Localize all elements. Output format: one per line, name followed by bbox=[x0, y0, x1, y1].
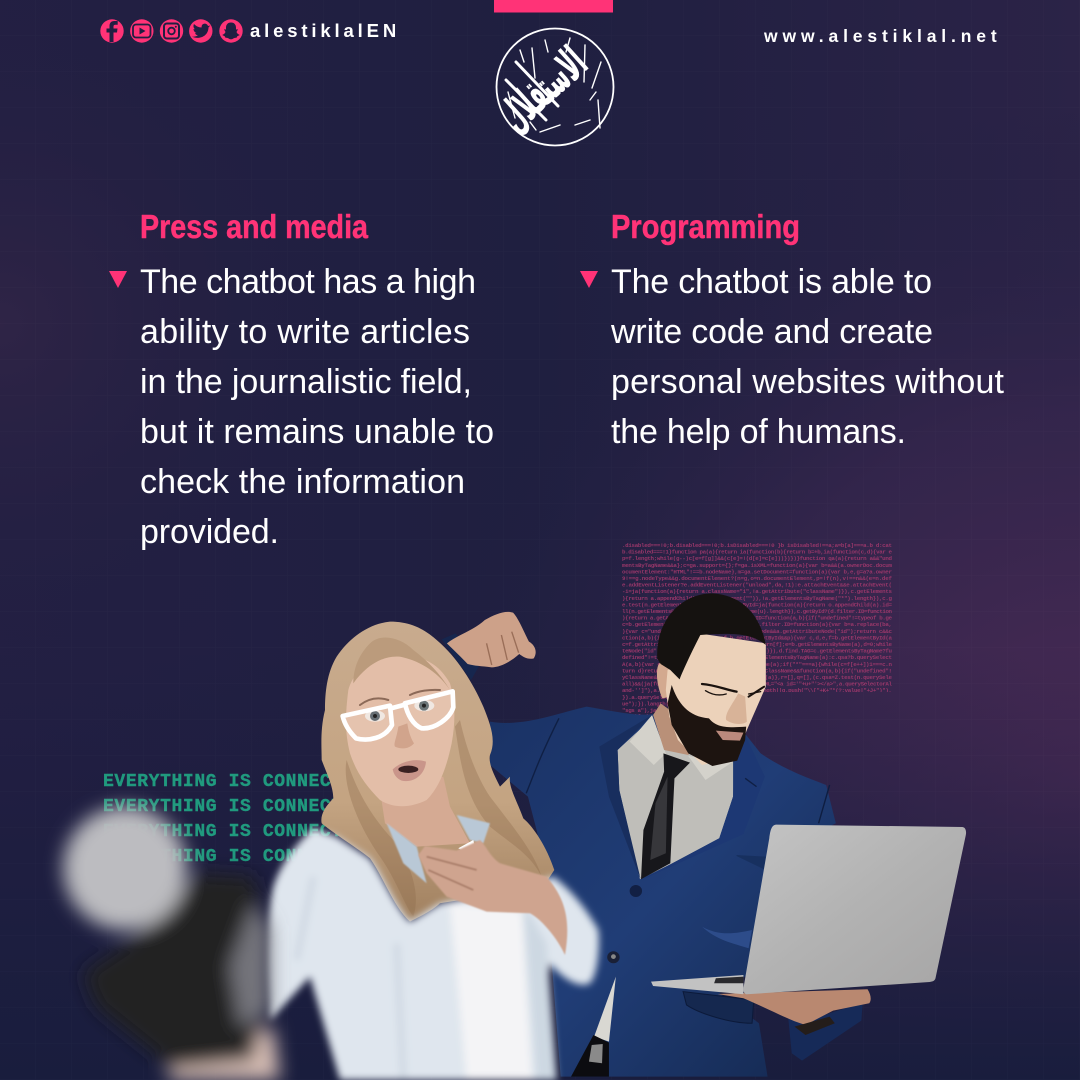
code texture: yClassName&&p)return b.getElementsByClassName(a)},r=[],q=[],(c.qsa=Z.test(n.querySele bbox=[622, 674, 893, 681]
green repeated slogan: EVERYTHING IS CONNECTED bbox=[103, 772, 365, 792]
icon: instagram bbox=[160, 19, 183, 43]
code texture: c=f.getAttributeNode("id"),c&&c.value===a)return[f];e=b.getElementsByName(a),d=0;while bbox=[622, 641, 893, 648]
text block: press and media: The chatbot has a high bbox=[140, 263, 476, 301]
mic head bbox=[63, 807, 187, 930]
social icons row bbox=[100, 19, 243, 43]
text block: programming: write code and create bbox=[610, 313, 933, 351]
code texture: .disabled===!0;b.disabled===!0;b.isDisabled===!0 }b isDisabled!==a;a=b[a]===a.b d:cat bbox=[622, 542, 892, 549]
mic sleeve shadow bbox=[230, 903, 270, 1027]
woman hair parting bbox=[353, 638, 450, 690]
code texture: defined"!=typeof b.getElementsByTagName?b.getElementsByTagName(a):c.qsa?b.querySelect bbox=[622, 654, 892, 661]
man lips bbox=[716, 731, 743, 741]
woman back hair bbox=[321, 622, 554, 922]
man fist bbox=[447, 612, 536, 667]
code texture: b.disabled===!1}function pa(a){return ia(function(b){return b=+b,ia(function(c,d){var e bbox=[622, 549, 893, 556]
text block: press and media: provided. bbox=[140, 513, 279, 551]
code texture: turn d}return f},d.find.CLASS=c.getElementsByClassName&&function(a,b){if("undefined"! bbox=[622, 667, 892, 674]
text block: press and media bbox=[140, 263, 494, 551]
code texture: ocumentElement:"HTML"!==b.nodeName},m=ga.setDocument=function(a){var b,e,g=a?a.owner bbox=[622, 568, 893, 575]
icon: facebook bbox=[100, 19, 124, 43]
code texture: 9!==g.nodeType&&g.documentElement?(n=g,o=n.documentElement,p=!f(n),v!==n&&(e=n.def bbox=[622, 575, 893, 582]
code texture: p=f.length;while(g--)c[e=f[g]]&&(c[e]=!(d[e]=c[e]))})})}function qa(a){return a&&"und bbox=[622, 555, 893, 562]
code texture: ction(a,b){if("undefined"!=typeof b.getElementById&&p){var c,d,e,f=b.getElementById(a bbox=[622, 634, 893, 641]
code texture: A(a,b){var c,d=[],e=0,f=b.getElementsByTagName(a);if("*"===a){while(c=f[e++])1===c.n bbox=[622, 661, 893, 668]
laptop bbox=[651, 825, 966, 994]
icon: twitter bbox=[189, 19, 212, 43]
code texture: e.test(n.getElementsByClassName),c.getById=ja(function(a){return o.appendChild(a).id= bbox=[622, 601, 893, 608]
woman collar bbox=[387, 815, 490, 883]
text block: programming: the help of humans. bbox=[611, 413, 906, 451]
bullet marker left bbox=[109, 271, 127, 288]
bullet marker right bbox=[580, 271, 598, 288]
man jacket bbox=[490, 707, 836, 1077]
man collar bbox=[630, 715, 733, 780]
code texture: teNode("id"),c&&c.value===a)return[f]}return[]}}),d.find.TAG=c.getElementsByTagName?fu bbox=[622, 648, 893, 655]
woman glasses bbox=[343, 691, 453, 740]
man shirt bottom and trousers bbox=[571, 977, 616, 1077]
code texture: c=b.getElementById(a);return c?[c]:[]}}):(d.filter.ID=function(a){var b=a.replace(ba, bbox=[622, 621, 892, 628]
woman eyes bbox=[365, 700, 434, 722]
man hair bbox=[657, 593, 766, 679]
green repeated slogan bbox=[104, 774, 338, 862]
woman neck bbox=[380, 777, 470, 847]
website url: www.alestiklal.net bbox=[763, 26, 1000, 46]
woman mouth bbox=[393, 760, 426, 781]
woman shirt blurred bbox=[267, 828, 599, 1080]
man holding hand bbox=[718, 989, 871, 1025]
woman hand on chest bbox=[418, 840, 567, 955]
man face bbox=[666, 633, 766, 765]
top accent bar bbox=[494, 0, 613, 12]
code texture: ){return a.appendChild(n.createComment("")),!a.getElementsByTagName("*").length}),c.g bbox=[622, 595, 893, 602]
man with laptop bbox=[442, 593, 966, 1077]
tie highlight bbox=[650, 777, 668, 860]
blurred microphone bbox=[63, 807, 280, 1080]
code texture: all)&&(ja(function(a){o.appendChild(a).innerHTML="<a id='"+u+"'></a>",a.querySelectorAl bbox=[622, 681, 893, 688]
code texture: "sgs a"),ja(function(a){var b=n.createElement("input");b.setAttribute("type","hidden"), bbox=[622, 707, 892, 714]
man tie bbox=[641, 753, 690, 879]
man beard bbox=[668, 685, 746, 766]
woman nose bbox=[395, 723, 414, 748]
code texture bbox=[622, 542, 893, 720]
text block: programming: personal websites without bbox=[611, 363, 1005, 401]
icon: snapchat bbox=[219, 19, 243, 43]
man watch bbox=[794, 1017, 835, 1035]
man buttons bbox=[607, 885, 642, 963]
code texture: and-'']"),a.querySelectorAll("[selected]").length||q.push("\\["+K+"*(?:value|"+J+")"), bbox=[622, 687, 892, 694]
man nose bbox=[726, 693, 747, 724]
heading: programming: Programming bbox=[611, 208, 800, 245]
man eyes and brows bbox=[702, 684, 764, 697]
man raised arm sleeve bbox=[442, 633, 480, 680]
woman face bbox=[346, 657, 454, 806]
woman bbox=[267, 622, 599, 1080]
green repeated slogan: EVERYTHING IS CONNECTED bbox=[103, 797, 365, 817]
code texture: ){return a.getAttribute("id")===b}},d.find.ID=function(a,b){if("undefined"!=typeof b.ge bbox=[622, 615, 893, 622]
woman hair shading bbox=[346, 720, 542, 917]
logo: calligraphy roundel: الاستقلال bbox=[490, 38, 597, 141]
woman brows bbox=[360, 690, 440, 705]
code texture: ue");}).langth||q.push(":checked"),a.querySelectorAll("a#"+u+"+*").length||q.push(".#.+ bbox=[622, 700, 893, 707]
text block: press and media: in the journalistic field, bbox=[140, 363, 472, 401]
text block: press and media: check the information bbox=[140, 463, 465, 501]
man ear bbox=[657, 663, 670, 698]
icon: youtube bbox=[130, 19, 154, 43]
code texture: disabled===!0,b.disabled===!0;b.isDisabled===!0 }b isDisabled!==a;a=b[a]===a.b d:cat bbox=[622, 713, 892, 720]
heading: press and media: Press and media bbox=[140, 208, 369, 245]
mic handle bbox=[83, 873, 270, 1068]
man right sleeve bbox=[788, 1003, 863, 1061]
man neck bbox=[653, 703, 702, 755]
social handle: alestiklalEN bbox=[250, 20, 399, 41]
green repeated slogan: EVERYTHING IS CONNECTED bbox=[103, 822, 365, 842]
code texture: }).a.querySelectorAll("[id~="+u+"-]").length||q.push("~="),a.querySelectorAll(":checked bbox=[622, 694, 893, 701]
text block: press and media: but it remains unable to bbox=[140, 413, 494, 451]
man lapels bbox=[599, 715, 765, 881]
woman fingers bbox=[427, 857, 477, 890]
mic arm skin bbox=[167, 1027, 280, 1080]
man shirt bbox=[618, 718, 733, 879]
text block: programming: The chatbot is able to bbox=[611, 263, 932, 301]
text block: press and media: ability to write articles bbox=[140, 313, 470, 351]
woman undershirt at neck bbox=[458, 840, 477, 853]
code texture: ll(n.getElementsByName||!n.getElementsByName(u).length}),c.getById?(d.filter.ID=function bbox=[622, 608, 893, 615]
text block: programming bbox=[610, 263, 1005, 451]
code texture: e.addEventListener?e.addEventListener("unload",da,!1):e.attachEvent&&e.attachEvent( bbox=[622, 582, 892, 589]
green repeated slogan: EVERYTHING IS CONNECTED bbox=[103, 847, 365, 867]
code texture: ){var c="undefined"!=typeof a.getAttributeNode&&a.getAttributeNode("id");return c&&c bbox=[622, 628, 893, 635]
code texture: mentsByTagName&&a};c=ga.support={};f=ga.isXML=function(a){var b=a&&(a.ownerDoc.docum bbox=[622, 562, 893, 569]
code texture: -i=ja(function(a){return a.className="i",!a.getAttribute("className")}),c.getElements bbox=[622, 588, 893, 595]
